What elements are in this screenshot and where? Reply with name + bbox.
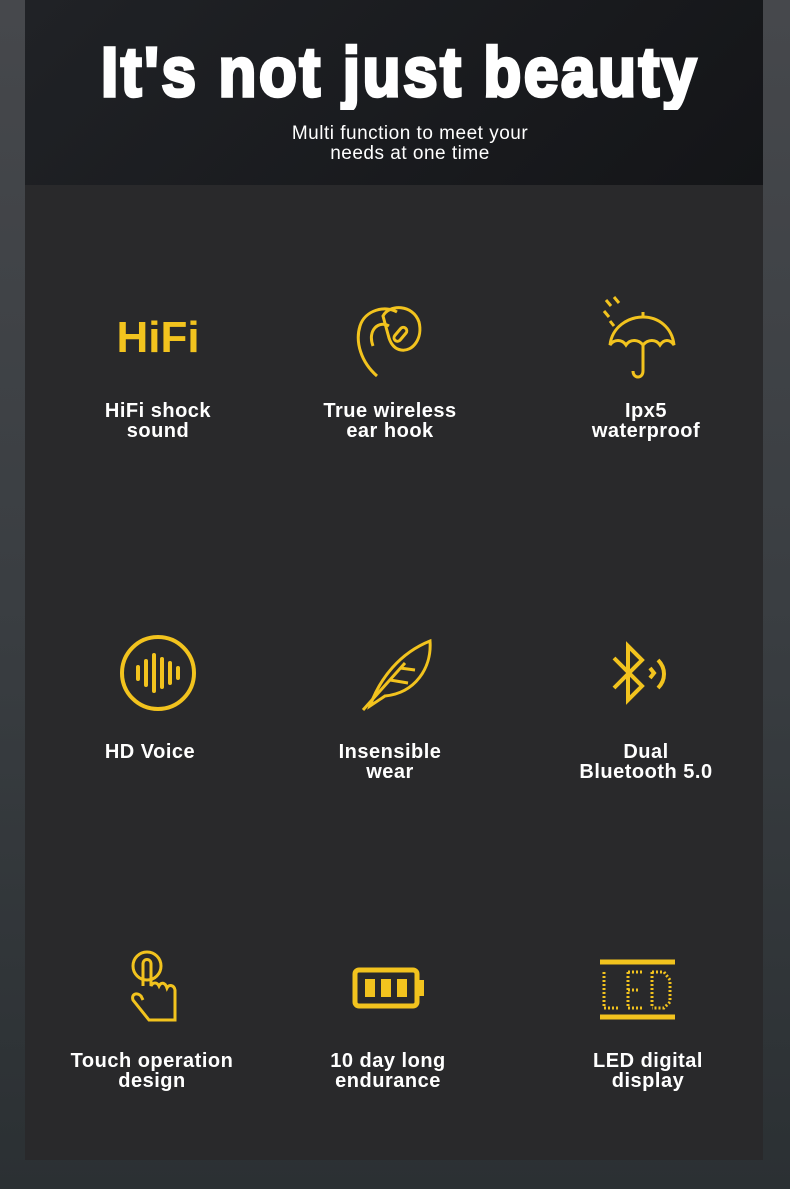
feature: HiFi bbox=[105, 313, 211, 442]
label: Bluetooth 5.0 bbox=[579, 761, 713, 783]
label bbox=[592, 400, 700, 442]
label: HD Voice bbox=[105, 741, 195, 763]
label bbox=[593, 1050, 703, 1092]
feature: endurance bbox=[330, 968, 446, 1092]
feature: LED bbox=[593, 960, 703, 1092]
label bbox=[330, 1050, 446, 1092]
label bbox=[105, 400, 211, 442]
label: 10 day long bbox=[330, 1050, 446, 1072]
features panel bbox=[25, 185, 763, 1160]
feature: HD Voice bbox=[105, 635, 196, 763]
label: Ipx5 bbox=[625, 400, 667, 422]
label bbox=[579, 741, 713, 783]
feature: bluetooth bbox=[579, 641, 713, 783]
icon: HiFi: HiFi bbox=[116, 313, 200, 362]
label: True wireless bbox=[323, 400, 457, 422]
label: Touch operation bbox=[71, 1050, 233, 1072]
label: display bbox=[612, 1070, 684, 1092]
label bbox=[70, 1050, 233, 1092]
feature: ear hook bbox=[323, 306, 457, 442]
icon: battery bbox=[352, 968, 424, 1008]
label bbox=[339, 741, 441, 783]
feature: insensible wear bbox=[339, 638, 441, 783]
subtitle: needs at one time bbox=[330, 143, 490, 164]
feature: waterproof bbox=[592, 296, 700, 442]
label: waterproof bbox=[592, 420, 700, 442]
label: ear hook bbox=[346, 420, 434, 442]
label: wear bbox=[366, 761, 414, 783]
icon: voice circle bbox=[120, 635, 196, 711]
feature: touch bbox=[70, 950, 233, 1092]
icon: ear hook bbox=[356, 306, 422, 377]
icon: bluetooth bbox=[612, 641, 666, 705]
label: sound bbox=[127, 420, 189, 442]
label: Dual bbox=[623, 741, 669, 763]
label: Insensible bbox=[339, 741, 441, 763]
label: endurance bbox=[335, 1070, 441, 1092]
icon: touch hand bbox=[131, 950, 176, 1022]
icon: umbrella bbox=[602, 296, 676, 378]
label: HiFi shock bbox=[105, 400, 211, 422]
label: design bbox=[118, 1070, 186, 1092]
header panel bbox=[25, 0, 763, 185]
icon: LED display bbox=[600, 960, 675, 1020]
label: LED digital bbox=[593, 1050, 703, 1072]
subtitle bbox=[292, 123, 528, 164]
subtitle: Multi function to meet your bbox=[292, 123, 528, 144]
icon: feather bbox=[362, 638, 432, 711]
label bbox=[323, 400, 457, 442]
